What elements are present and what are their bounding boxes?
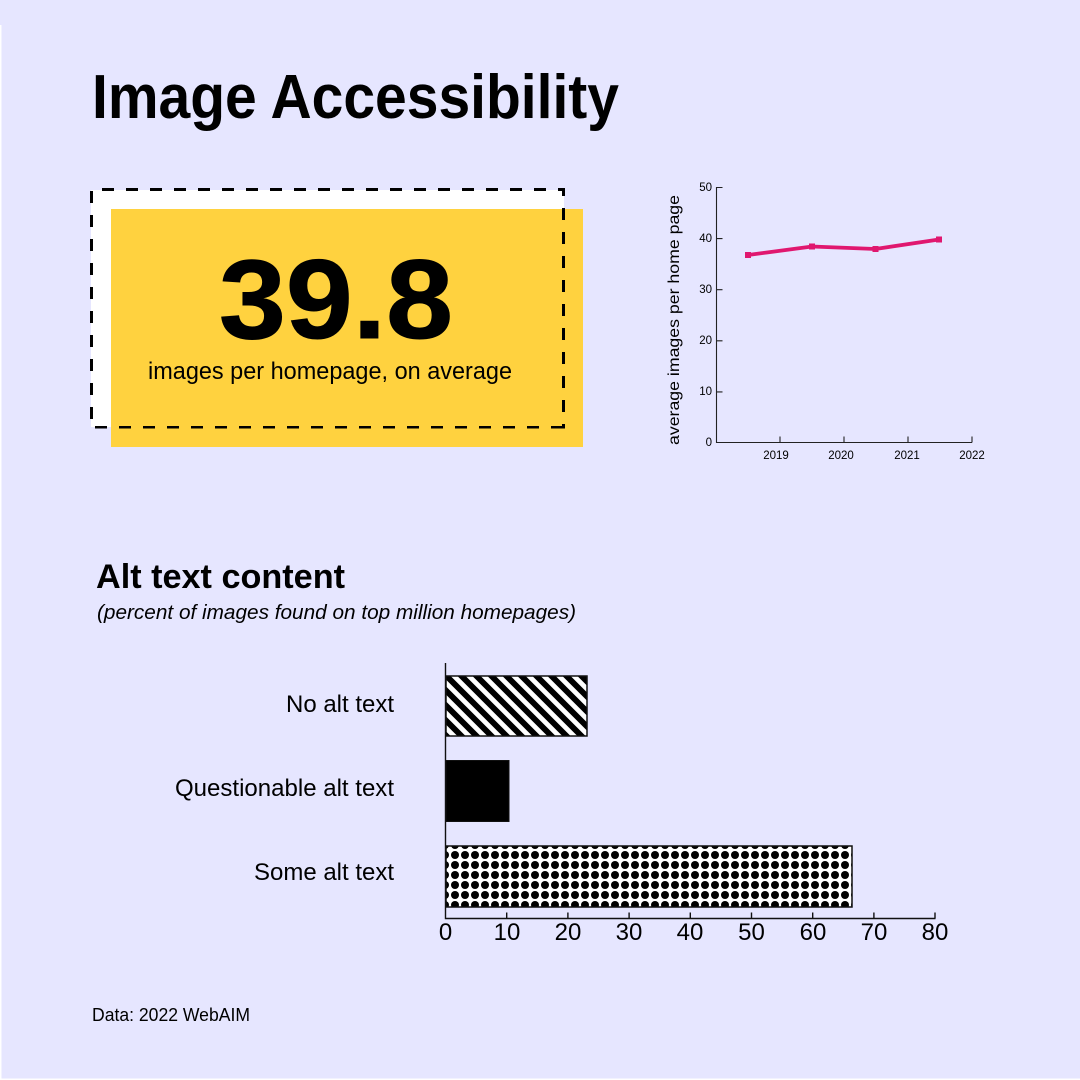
y axis labels: 10 (699, 386, 712, 398)
y axis labels (699, 182, 712, 449)
x axis labels (439, 919, 948, 946)
y axis labels: 50 (699, 182, 712, 194)
x axis labels: 80 (922, 919, 948, 946)
section subtitle: (percent of images found on top million homepages) (97, 601, 576, 624)
yellow card (111, 209, 583, 447)
x axis labels: 60 (800, 919, 826, 946)
x axis labels: 40 (677, 919, 703, 946)
x axis labels: 2022 (959, 450, 985, 462)
y axis labels: 30 (699, 284, 712, 296)
data source: Data: 2022 WebAIM (92, 1005, 250, 1025)
category labels: No alt text (286, 691, 394, 718)
x axis labels: 0 (439, 919, 452, 946)
data line (745, 236, 942, 258)
y axis labels: 40 (699, 233, 712, 245)
bar: no alt text (446, 676, 587, 736)
x axis labels: 70 (861, 919, 887, 946)
category labels: Some alt text (254, 859, 394, 886)
white offset card (91, 190, 564, 427)
y axis title: average images per home page (666, 195, 683, 445)
bar: questionable alt text (446, 760, 509, 822)
axes and ticks (446, 663, 936, 918)
stat caption: images per homepage, on average (148, 358, 512, 385)
section heading: alt text content: Alt text content (96, 558, 345, 596)
x axis labels: 20 (555, 919, 581, 946)
x axis labels: 50 (738, 919, 765, 946)
x axis labels: 30 (616, 919, 642, 946)
dashed outline (90, 188, 565, 428)
line chart: average images per home page (666, 182, 985, 462)
x axis labels (763, 450, 985, 462)
bar: some alt text (446, 846, 852, 907)
x axis labels: 2019 (763, 450, 789, 462)
x axis labels: 2020 (828, 450, 854, 462)
x axis labels: 2021 (894, 450, 920, 462)
category labels (175, 691, 394, 886)
bar chart: alt text content (175, 663, 948, 946)
category labels: Questionable alt text (175, 775, 394, 802)
x axis labels: 10 (494, 919, 520, 946)
big number: 39.8 (219, 237, 453, 362)
axes and ticks (716, 187, 972, 442)
panel: key statistic (90, 188, 583, 447)
y axis labels: 20 (699, 335, 712, 347)
y axis labels: 0 (706, 437, 712, 449)
title: Image Accessibility (92, 63, 619, 132)
